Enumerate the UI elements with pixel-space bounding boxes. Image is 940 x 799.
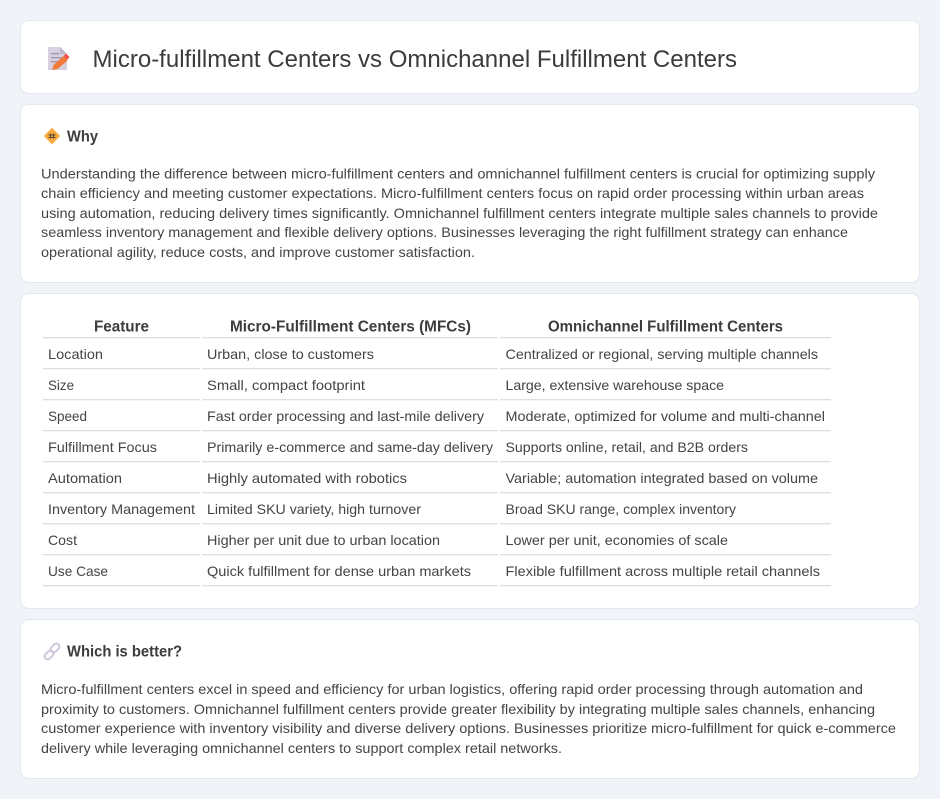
table row: size: Large, extensive warehouse space	[506, 377, 724, 393]
table row: speed: Speed	[48, 408, 87, 424]
panel: which is better	[20, 620, 920, 778]
table row: speed: Moderate, optimized for volume and multi-channel	[506, 408, 825, 424]
table row: fulfillment focus	[43, 439, 831, 462]
table row: use case: Quick fulfillment for dense urban markets	[207, 563, 471, 579]
text block: which is better paragraph	[41, 681, 896, 756]
icon: document with pencil	[48, 47, 70, 70]
title: Micro-fulfillment Centers vs Omnichannel Fulfillment Centers	[92, 46, 737, 73]
table row: use case: Use Case	[48, 563, 108, 579]
heading: why: Why	[67, 128, 98, 146]
text block: why paragraph: operational agility, reduce costs, and improve customer satisfaction.	[41, 244, 475, 260]
text block: which is better paragraph: proximity to customers. Omnichannel fulfillment centers provide greater flexibility by integrating multiple sales channels, enhancing	[41, 701, 875, 717]
table row: inventory management: Limited SKU variety, high turnover	[207, 501, 421, 517]
panel: why	[20, 104, 920, 282]
icon: diamond sign	[44, 128, 60, 144]
text block: why paragraph: seamless inventory management and flexible delivery options. Businesses leveraging the right fulfillment strategy can enhance	[41, 224, 848, 240]
table header row: Omnichannel Fulfillment Centers	[548, 318, 783, 336]
table row: fulfillment focus: Primarily e-commerce and same-day delivery	[207, 439, 493, 455]
table row: location	[43, 346, 831, 369]
table row: cost: Cost	[48, 532, 77, 548]
panel: comparison table	[20, 294, 920, 608]
text block: why paragraph: using automation, reducing delivery times significantly. Omnichannel fulfillment centers integrate multiple sales channels to provide	[41, 205, 878, 221]
table row: inventory management: Broad SKU range, complex inventory	[506, 501, 736, 517]
table row: use case	[43, 563, 831, 586]
table row: location: Centralized or regional, serving multiple channels	[506, 346, 818, 362]
table row: location: Urban, close to customers	[207, 346, 374, 362]
table row: inventory management: Inventory Management	[48, 501, 195, 517]
table row: speed	[43, 408, 831, 431]
table row: automation: Automation	[48, 470, 122, 486]
text block: why paragraph	[41, 166, 878, 260]
table header row	[43, 318, 831, 338]
table row: speed: Fast order processing and last-mile delivery	[207, 408, 484, 424]
table header row: Feature	[94, 318, 149, 336]
table row: automation: Variable; automation integrated based on volume	[506, 470, 818, 486]
table row: size	[43, 377, 831, 400]
table row: location: Location	[48, 346, 103, 362]
text block: which is better paragraph: delivery while leveraging omnichannel centers to support complex retail networks.	[41, 740, 562, 756]
table row: inventory management	[43, 501, 831, 524]
table row: size: Size	[48, 377, 74, 393]
table row: use case: Flexible fulfillment across multiple retail channels	[506, 563, 820, 579]
text block: which is better paragraph: customer experience with inventory visibility and diverse delivery options. Businesses prioritize micro-fulfillment for quick e-commerce	[41, 720, 896, 736]
icon: chain link	[43, 642, 61, 661]
panel: title header	[20, 20, 920, 94]
table row: size: Small, compact footprint	[207, 377, 365, 393]
table row: fulfillment focus: Fulfillment Focus	[48, 439, 157, 455]
table header row: Micro-Fulfillment Centers (MFCs)	[230, 318, 471, 336]
table row: cost: Lower per unit, economies of scale	[506, 532, 728, 548]
text block: why paragraph: Understanding the difference between micro-fulfillment centers and omnichannel fulfillment centers is crucial for optimizing supply	[41, 166, 875, 182]
table row: cost: Higher per unit due to urban location	[207, 532, 440, 548]
table row: cost	[43, 532, 831, 555]
text block: why paragraph: chain efficiency and meeting customer expectations. Micro-fulfillment centers focus on rapid order processing within urban areas	[41, 185, 864, 201]
table row: fulfillment focus: Supports online, retail, and B2B orders	[506, 439, 748, 455]
heading: which is better: Which is better?	[67, 644, 182, 660]
text block: which is better paragraph: Micro-fulfillment centers excel in speed and efficiency for urban logistics, offering rapid order processing through automation and	[41, 681, 863, 697]
table row: automation: Highly automated with robotics	[207, 470, 407, 486]
table row: automation	[43, 470, 831, 493]
